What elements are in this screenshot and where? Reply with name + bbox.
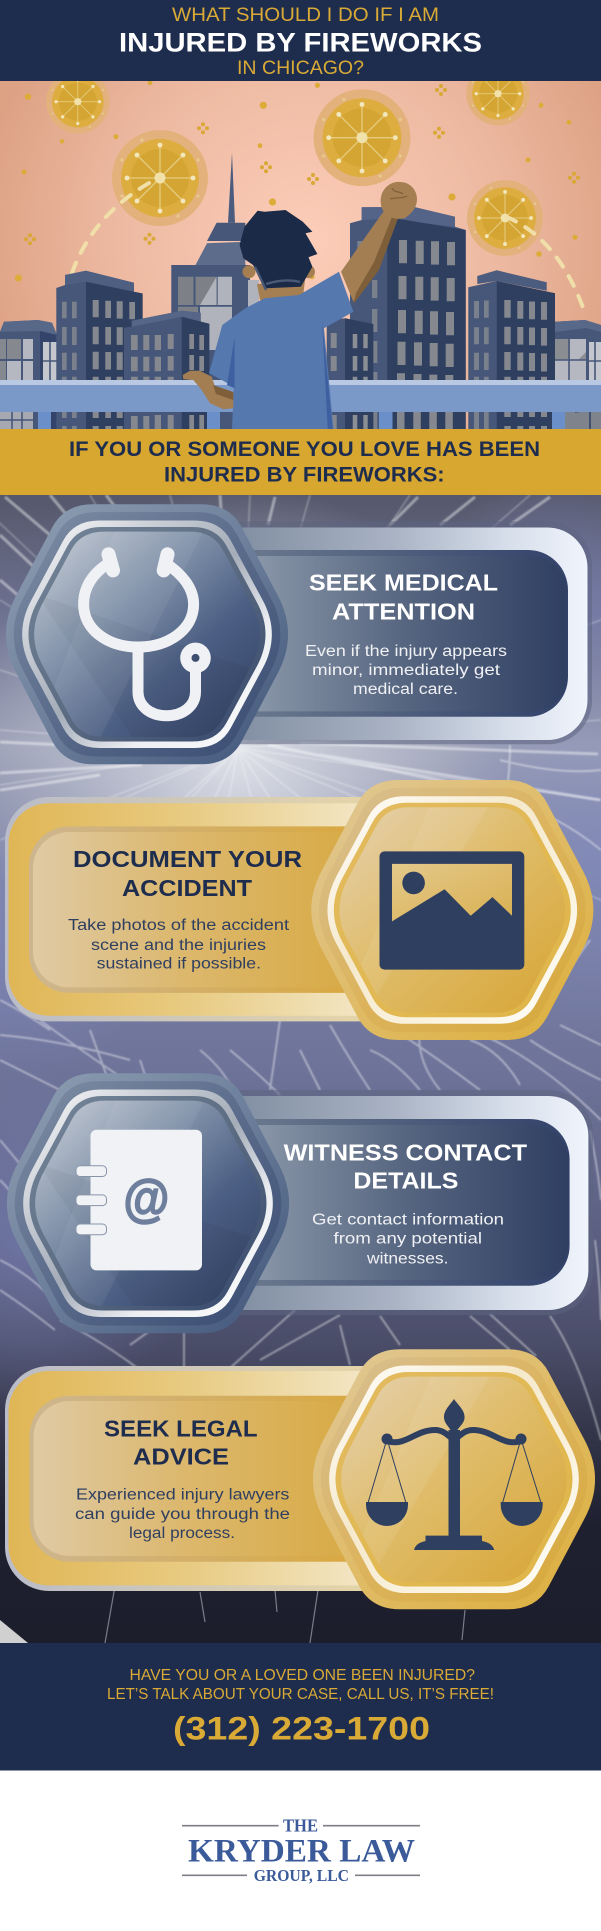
icon: address book: @ <box>123 1170 169 1228</box>
heading: ACCIDENT <box>122 875 253 901</box>
law firm logo: KRYDER LAW <box>188 1834 415 1870</box>
body text <box>68 917 290 973</box>
step 2 card: document your accident <box>5 780 593 1040</box>
building: right block <box>468 270 555 429</box>
body text: can guide you through the <box>75 1506 290 1523</box>
title line 3: IN CHICAGO? <box>237 57 364 79</box>
call to action footer <box>0 1643 601 1770</box>
building: left tall block <box>56 271 143 429</box>
icon: stethoscope <box>84 554 211 716</box>
hexagon badge <box>313 1349 595 1609</box>
heading <box>284 1139 528 1194</box>
mask strap <box>255 267 300 290</box>
body text: Take photos of the accident <box>68 917 290 934</box>
title line 2: INJURED BY FIREWORKS <box>119 28 482 58</box>
body text <box>305 643 507 698</box>
hexagon badge <box>311 780 593 1040</box>
balcony railing <box>0 380 601 412</box>
heading: SEEK MEDICAL <box>309 570 498 596</box>
law firm logo: THE <box>283 1816 318 1836</box>
hair <box>240 210 317 288</box>
building: far right glass <box>555 320 601 429</box>
body text: scene and the injuries <box>91 937 266 954</box>
fireworks photo background <box>0 470 601 1643</box>
heading: ADVICE <box>133 1444 229 1470</box>
heading: DETAILS <box>353 1168 458 1194</box>
building: left-centre low block <box>124 311 209 429</box>
t-shirt <box>209 272 353 429</box>
falling curved streaks <box>0 745 601 1440</box>
heading <box>104 1415 258 1470</box>
building: central glass tower with spire <box>171 153 259 429</box>
heading <box>73 846 302 901</box>
illustration: person watching fireworks over the city <box>0 62 601 429</box>
gold subheading band <box>0 429 601 495</box>
sky <box>0 81 601 429</box>
body text: sustained if possible. <box>97 956 261 973</box>
person <box>183 182 417 429</box>
hexagon badge <box>6 504 288 764</box>
heading: WITNESS CONTACT <box>284 1139 528 1165</box>
body text: Even if the injury appears <box>305 643 507 660</box>
body text: Get contact information <box>312 1211 504 1228</box>
title banner <box>0 0 601 81</box>
body text: Experienced injury lawyers <box>76 1487 290 1504</box>
law firm logo <box>182 1816 420 1885</box>
neck and ears <box>242 265 315 300</box>
building: right-hand low block behind person <box>327 318 373 429</box>
body text: minor, immediately get <box>312 662 501 679</box>
raised arm <box>341 182 417 304</box>
blue haze patches <box>0 470 601 1410</box>
lower firework rays <box>105 1586 465 1643</box>
card frame <box>5 1366 454 1591</box>
body text: from any potential <box>334 1231 482 1248</box>
card frame <box>5 797 450 1021</box>
card frame <box>147 521 592 744</box>
subheading line 2: INJURED BY FIREWORKS: <box>164 464 445 487</box>
law firm logo: GROUP, LLC <box>254 1866 349 1885</box>
hexagon badge <box>7 1073 289 1333</box>
sparkle dots <box>15 80 580 282</box>
building: right-hand tall tower <box>350 207 466 429</box>
rocket trails <box>72 177 584 312</box>
fireworks bursts <box>46 62 543 256</box>
building: far left glass <box>0 320 57 429</box>
heading: SEEK LEGAL <box>104 1415 258 1441</box>
call to action line 1: HAVE YOU OR A LOVED ONE BEEN INJURED? <box>130 1667 475 1684</box>
heading: DOCUMENT YOUR <box>73 846 302 872</box>
body text: medical care. <box>353 681 458 698</box>
heading <box>309 570 498 625</box>
icon: address book <box>76 1130 202 1270</box>
step 3 card: witness contact details <box>7 1073 593 1333</box>
fine rays <box>0 495 601 900</box>
subheading line 1: IF YOU OR SOMEONE YOU LOVE HAS BEEN <box>69 438 540 461</box>
step 4 card: seek legal advice <box>5 1349 595 1609</box>
body text: legal process. <box>129 1525 235 1542</box>
phone number: (312) 223-1700 <box>173 1709 430 1746</box>
step 1 card: seek medical attention <box>6 504 592 764</box>
body text <box>75 1487 290 1542</box>
card frame <box>148 1090 593 1315</box>
call to action line 2: LET’S TALK ABOUT YOUR CASE, CALL US, IT’S FREE! <box>107 1686 494 1703</box>
lower arm and hand <box>183 371 233 409</box>
icon: picture <box>380 851 524 970</box>
arm shadow <box>213 385 233 400</box>
body text <box>312 1211 504 1268</box>
railing posts <box>38 411 565 429</box>
corner shape <box>0 1620 28 1643</box>
icon: scales of justice <box>366 1399 543 1550</box>
body text: witnesses. <box>366 1250 448 1268</box>
bright rays <box>0 495 600 800</box>
shirt folds <box>227 320 333 429</box>
title line 1: WHAT SHOULD I DO IF I AM <box>172 5 439 26</box>
heading: ATTENTION <box>332 599 475 625</box>
